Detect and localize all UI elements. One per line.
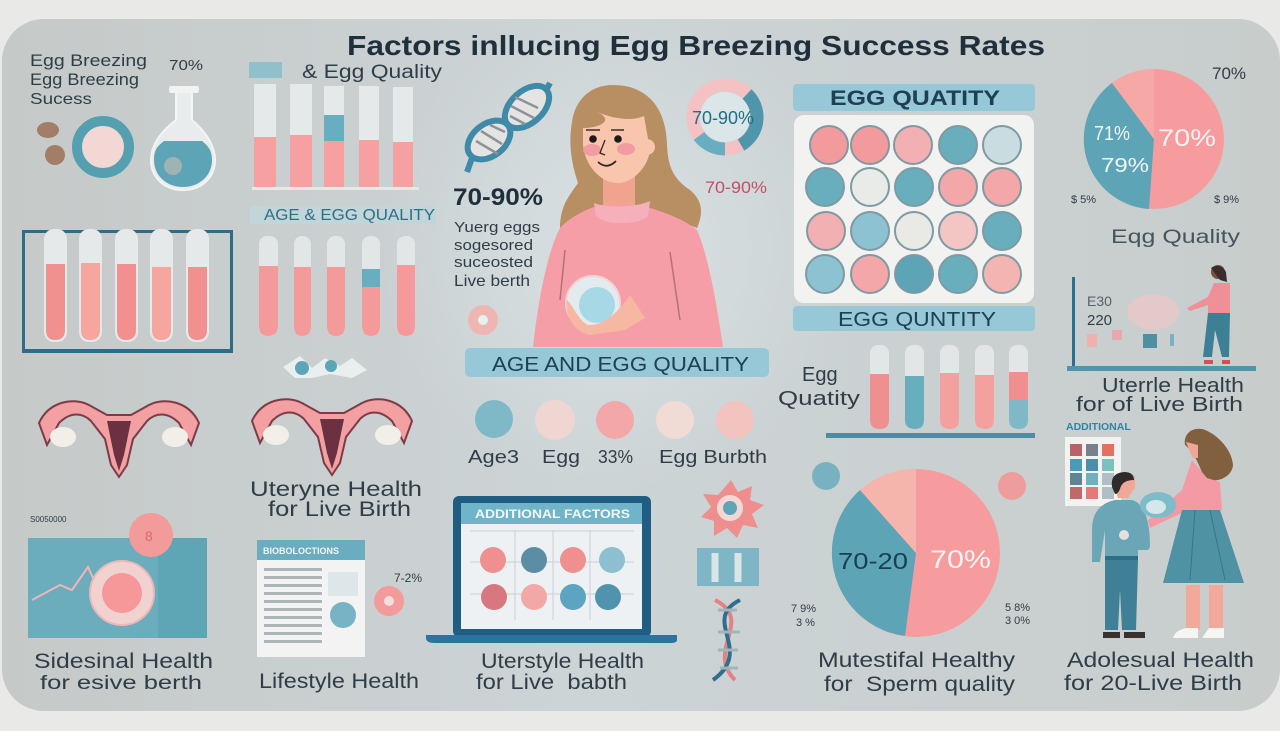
- text: uteryne health: [250, 478, 422, 521]
- text: egg quality heading: & Egg Quality: [302, 62, 443, 83]
- text: lifestyle health: Lifestyle Health: [259, 670, 419, 693]
- chart: tubes: [259, 236, 415, 336]
- face: [583, 112, 650, 183]
- chart: bottom pie: [791, 462, 1030, 637]
- collar: [594, 201, 650, 223]
- panel: document: 7-2%: [394, 571, 422, 585]
- icon: small cells strip: [283, 356, 367, 378]
- egg held: [1140, 492, 1176, 518]
- panel: egg quality tray: [793, 84, 1035, 303]
- labels: [468, 447, 767, 467]
- text: adolesual health: [1064, 649, 1254, 695]
- label: Egg: [802, 364, 838, 386]
- chart: top right pie: 70%: [1158, 125, 1216, 152]
- text: stat description: Live berth: [454, 273, 530, 290]
- heading text: AGE & EGG QUALITY: [264, 207, 435, 224]
- icon: cell sun: [701, 480, 764, 538]
- panel: bottom left photo card: [28, 513, 207, 638]
- panel: age and egg quality tubes: [250, 206, 436, 336]
- icon: uterus middle: [252, 399, 412, 475]
- chart: bottom pie: 70%: [930, 546, 991, 574]
- chart: presenter with chart: 220: [1087, 312, 1112, 329]
- banner: age and egg quality: [465, 348, 769, 377]
- text: egg breezing success heading: Sucess: [30, 91, 92, 108]
- heading: [249, 62, 282, 78]
- banner: [793, 84, 1035, 111]
- row: eggs by age: [468, 400, 767, 467]
- text: uterstyle health: [476, 650, 644, 694]
- title: Factors inllucing Egg Breezing Success Rates: [347, 30, 1045, 61]
- chart: top right pie: [1084, 69, 1224, 209]
- text: mutestifal healthy: Mutestifal Healthy: [818, 649, 1016, 672]
- text: egg breezing success heading: Egg Breezing: [30, 70, 139, 89]
- text: 70 percent: 70%: [169, 57, 203, 74]
- icon: DNA helix top: [460, 78, 557, 172]
- text: uteryne health: for Live Birth: [268, 498, 411, 521]
- chart: donut 70-90: [692, 85, 757, 149]
- labels: Egg: [542, 447, 580, 467]
- chart: tubes: [252, 84, 419, 190]
- tubes: [826, 345, 1035, 438]
- icon: small egg: [468, 305, 498, 335]
- neck: [603, 175, 635, 205]
- woman figure: [1148, 429, 1244, 638]
- text: mutestifal healthy: for Sperm quality: [824, 673, 1016, 696]
- chart card: [1065, 437, 1121, 506]
- chart: presenter with chart: [1067, 265, 1256, 371]
- chart: top right pie: 71%: [1094, 123, 1130, 145]
- sweater: [533, 205, 723, 347]
- text: mutestifal healthy: [818, 649, 1016, 696]
- panel: egg quality tray: EGG QUATITY: [830, 87, 1000, 110]
- panel: left test tubes: [22, 229, 233, 353]
- panel: additional people: [1065, 421, 1244, 638]
- chart: presenter with chart: E30: [1087, 293, 1112, 309]
- panel: document: [257, 540, 422, 657]
- chart: bottom pie: 7 9%: [791, 603, 816, 615]
- tray: [794, 115, 1034, 303]
- panel: egg breezing success: [30, 51, 215, 190]
- text: uterrle health: [1076, 375, 1244, 416]
- panel: laptop additional factors: [426, 496, 677, 643]
- text: uterrle health: Uterrle Health: [1102, 375, 1244, 397]
- labels: Egg Burbth: [659, 447, 767, 467]
- panel: egg quantity: EGG QUNTITY: [838, 309, 996, 331]
- panel: test tubes & egg quality top: [249, 62, 443, 190]
- text: uteryne health: Uteryne Health: [250, 478, 422, 501]
- label: Quatity: [778, 388, 860, 410]
- chart: bottom pie: 5 8%: [1005, 602, 1030, 614]
- text: egg breezing success heading: [30, 51, 147, 108]
- banner: age and egg quality: AGE AND EGG QUALITY: [492, 353, 749, 376]
- boy figure: [1092, 472, 1150, 638]
- chart: bottom pie: 3 0%: [1005, 615, 1030, 627]
- text: egg quality right: Eqg Quality: [1111, 227, 1241, 248]
- label: [778, 364, 860, 410]
- panel: laptop additional factors: ADDITIONAL FACTORS: [475, 507, 630, 521]
- labels: Age3: [468, 447, 519, 467]
- figure: [1187, 265, 1230, 364]
- labels: 33%: [598, 447, 633, 467]
- panel: bottom left photo card: 8: [145, 528, 153, 544]
- text: uterrle health: for of Live Birth: [1076, 394, 1243, 416]
- panel: egg quantity: [778, 306, 1035, 438]
- text: small percentages: $ 5%: [1071, 194, 1096, 206]
- icon: flask: [151, 86, 215, 190]
- text: egg breezing success heading: Egg Breezing: [30, 51, 147, 70]
- icon: DNA helix bottom: [713, 600, 740, 680]
- illustration: woman holding egg: [533, 85, 723, 347]
- panel: bottom left photo card: S0050000: [30, 515, 67, 524]
- egg: [566, 276, 620, 330]
- text: sidesinal health: for esive berth: [40, 673, 202, 694]
- chart: bottom pie: 3 %: [796, 617, 815, 629]
- heading band: [250, 206, 436, 224]
- hands: [567, 295, 645, 335]
- text: uterstyle health: for Live babth: [476, 671, 627, 694]
- text: adolesual health: Adolesual Health: [1067, 649, 1254, 672]
- text: uterstyle health: Uterstyle Health: [481, 650, 644, 673]
- panel: document: BIOBOLOCTIONS: [263, 546, 339, 556]
- icon: egg cells: [37, 121, 129, 173]
- banner: [793, 306, 1035, 331]
- label: ADDITIONAL: [1066, 421, 1131, 433]
- text: stat 70-90%: 70-90%: [453, 184, 543, 211]
- text: stat description: Yuerg eggs: [454, 219, 540, 236]
- icon: uterus left: [39, 401, 199, 477]
- text: sidesinal health: [34, 650, 213, 694]
- text: stat description: suceosted: [454, 254, 533, 271]
- text: 70-90 red: 70-90%: [705, 178, 767, 197]
- chart: bottom pie: 70-20: [838, 548, 908, 574]
- chart: top right pie: 79%: [1101, 155, 1149, 177]
- text: 70 percent right: 70%: [1212, 64, 1246, 83]
- text: stat description: [454, 219, 540, 290]
- text: adolesual health: for 20-Live Birth: [1064, 672, 1242, 695]
- chart: donut 70-90: 70-90%: [692, 108, 754, 128]
- text: sidesinal health: Sidesinal Health: [34, 650, 213, 673]
- text: stat description: sogesored: [454, 237, 533, 254]
- icon: small organ card: [697, 548, 759, 586]
- hair: [560, 85, 701, 228]
- text: $ 9%: [1214, 194, 1239, 206]
